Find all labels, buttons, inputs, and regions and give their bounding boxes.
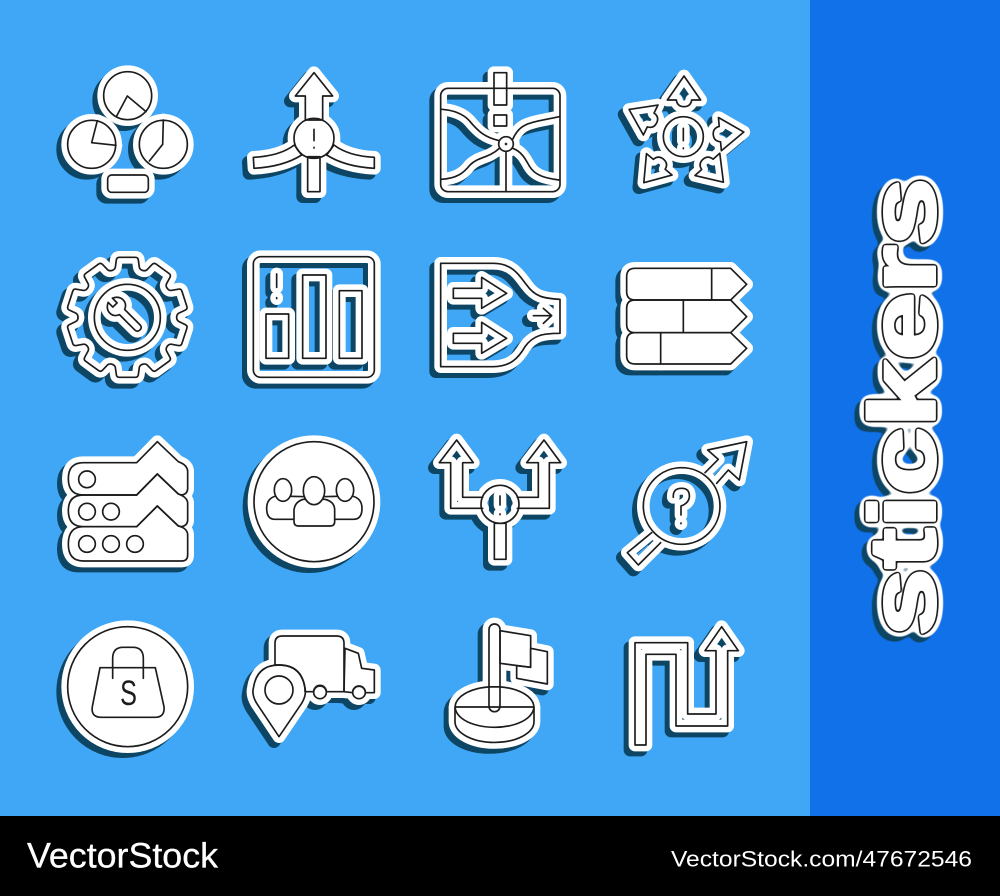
icon: funnel arrows (436, 263, 560, 372)
icon: five arrows star (617, 76, 745, 198)
icon: people in circle (249, 442, 374, 567)
icon: dollar shopping bag in circle (63, 627, 188, 752)
icon: arrow magnifier with question mark (622, 442, 747, 570)
icon: delivery truck with location pin (248, 636, 374, 742)
icon: flag on base (450, 624, 547, 747)
footer bar (0, 816, 1000, 896)
icon: stacked tabs with peaks (63, 442, 188, 566)
background (0, 0, 810, 816)
icon: gear with wrench (61, 257, 189, 382)
icon: split arrows with exclamation magnifier (434, 440, 561, 564)
title: stickers: stickers (850, 178, 954, 636)
side band (810, 0, 1000, 816)
icon: arrow strips (622, 268, 747, 369)
icon: dollar shopping bag in circle: S (120, 674, 137, 713)
icon: road map with exclamation (436, 73, 560, 197)
icon: bar chart frame (248, 257, 374, 382)
footer url: VectorStock.com/47672546 (671, 846, 972, 872)
footer brand: VectorStock (27, 836, 219, 876)
icon: winding arrow (630, 627, 738, 750)
icon: pie charts (63, 72, 187, 197)
icon: merging arrow with exclamation (248, 73, 374, 197)
